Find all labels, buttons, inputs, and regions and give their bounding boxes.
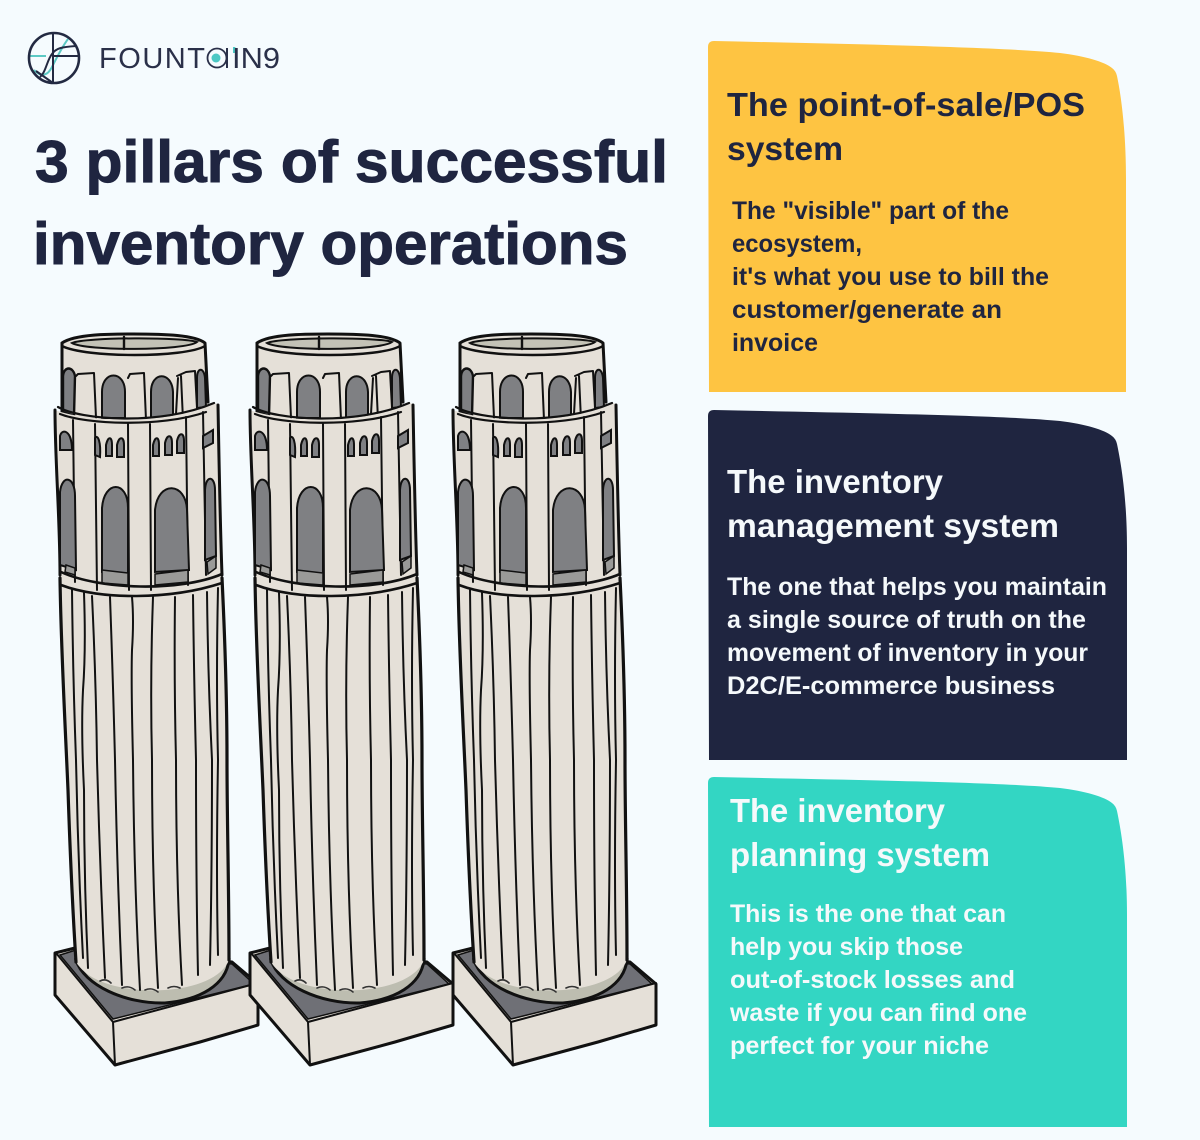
panel: inventory planning system <box>708 777 1127 1127</box>
text: inventory management description: D2C/E-commerce business <box>727 672 1055 700</box>
text: inventory planning description: help you skip those <box>730 933 963 961</box>
text: inventory planning description <box>729 900 1027 1060</box>
wordmark: IN9 <box>232 43 280 75</box>
heading: POS: The point-of-sale/POS <box>727 86 1085 123</box>
heading: inventory management: The inventory <box>727 463 944 500</box>
heading: inventory management <box>727 463 1059 544</box>
panel: point-of-sale system <box>708 41 1126 392</box>
heading: inventory planning: planning system <box>730 836 990 873</box>
panel: inventory management system <box>708 410 1127 760</box>
heading: inventory planning <box>730 792 990 873</box>
text: POS description: ecosystem, <box>732 230 862 258</box>
text: inventory planning description: perfect for your niche <box>730 1032 989 1060</box>
heading: inventory planning: The inventory <box>730 792 946 829</box>
text: inventory management description <box>727 573 1107 700</box>
text: inventory planning description: This is the one that can <box>730 900 1006 928</box>
illustration: second pillar <box>250 334 453 1065</box>
text: POS description <box>732 197 1049 357</box>
heading: inventory management: management system <box>727 507 1059 544</box>
heading: POS <box>727 86 1085 167</box>
illustration: first pillar <box>55 334 258 1065</box>
logo <box>29 33 280 83</box>
text: inventory management description: The one that helps you maintain <box>727 573 1107 601</box>
wordmark: FOUNT <box>99 43 205 75</box>
heading: POS: system <box>727 130 843 167</box>
title <box>33 129 668 277</box>
text: POS description: it's what you use to bill the <box>732 263 1049 291</box>
text: inventory management description: a single source of truth on the <box>727 606 1086 634</box>
text: POS description: The "visible" part of the <box>732 197 1009 225</box>
text: POS description: invoice <box>732 329 818 357</box>
text: inventory planning description: out-of-stock losses and <box>730 966 1015 994</box>
text: inventory planning description: waste if you can find one <box>729 999 1027 1027</box>
text: POS description: customer/generate an <box>732 296 1002 324</box>
title: 3 pillars of successful <box>35 129 668 195</box>
title: inventory operations <box>33 211 628 277</box>
wordmark <box>99 43 280 75</box>
text: inventory management description: movement of inventory in your <box>727 639 1088 667</box>
logo mark <box>29 33 79 83</box>
illustration: third pillar <box>453 334 656 1065</box>
